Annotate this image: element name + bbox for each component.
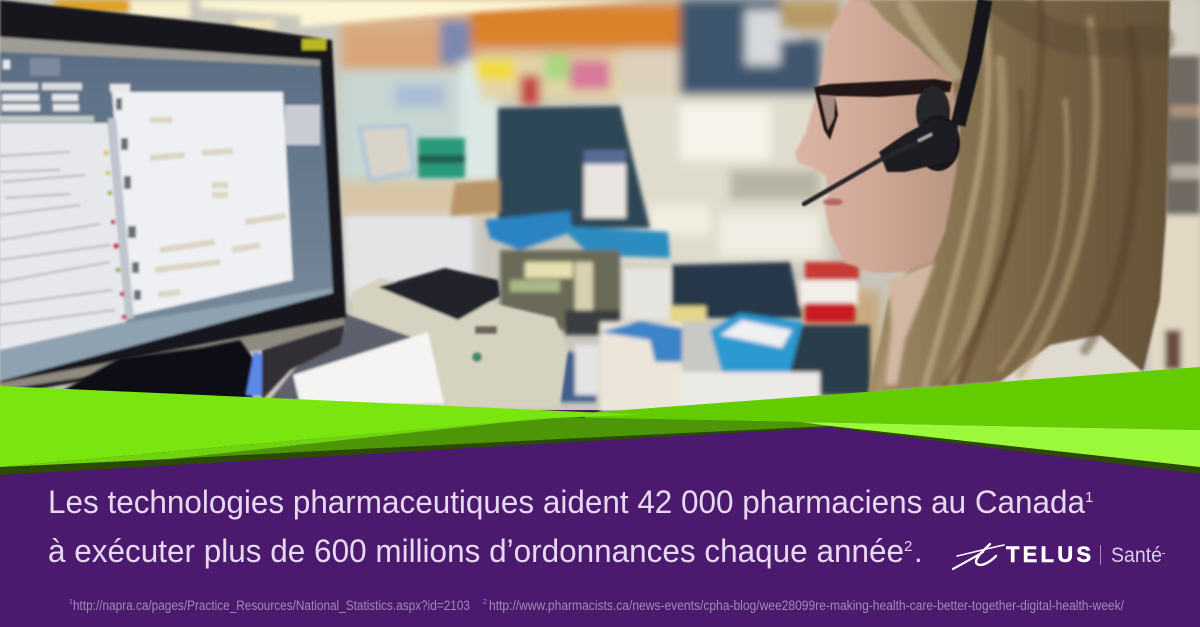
blurred counter objects — [346, 106, 870, 412]
headline — [48, 484, 1093, 569]
wordmark TELUS: TELUS — [1006, 542, 1091, 567]
headline line 1: Les technologies pharmaceutiques aident 42 000 pharmaciens au Canada — [48, 484, 1086, 520]
TELUS Santé logo — [953, 542, 1165, 569]
centre dark green fold — [170, 417, 830, 459]
form text lines — [0, 152, 115, 325]
dark green shadow strip — [0, 426, 1200, 475]
icon: TELUS script t — [953, 544, 1004, 569]
photo background: blurred pharmacy shelves — [340, 0, 880, 400]
woman: face — [795, 0, 960, 273]
headline line 2: à exécuter plus de 600 millions d’ordonnances chaque année — [48, 533, 904, 569]
footnote 1: 1 — [69, 599, 73, 606]
wordmark Santé: Santé — [1111, 544, 1162, 567]
ceiling lights — [55, 0, 650, 29]
monitor lip — [0, 318, 346, 390]
left bright green fold — [0, 386, 640, 467]
left lower green fold — [0, 417, 555, 467]
logo divider — [1100, 545, 1101, 565]
woman: neck — [885, 262, 935, 385]
screen form panels — [112, 92, 293, 316]
photo: pharmacist at workstation — [0, 0, 1200, 412]
headline line 1: 1 — [1085, 489, 1093, 506]
screen taskbar — [0, 288, 333, 381]
footnotes — [69, 598, 1124, 613]
monitor screen — [0, 37, 333, 381]
purple panel — [0, 427, 1200, 627]
label printer — [270, 268, 568, 408]
computer monitor — [0, 0, 346, 395]
right lime fold — [800, 422, 1200, 467]
woman: headset — [804, 0, 985, 204]
woman: lips — [823, 198, 843, 206]
headline line 2: 2 — [904, 538, 912, 555]
footnote 2: http://www.pharmacists.ca/news-events/cpha-blog/wee28099re-making-health-care-better-together-digital-health-week/ — [489, 598, 1124, 613]
background right wall — [1150, 0, 1200, 385]
monitor bezel — [0, 0, 346, 395]
headline line 2: . — [914, 534, 923, 569]
woman: glasses — [814, 79, 952, 140]
keyboard and mouse — [60, 325, 345, 400]
status dots — [104, 150, 126, 320]
woman: white coat — [990, 330, 1150, 385]
green ribbon banner — [0, 367, 1200, 475]
footnote 1: http://napra.ca/pages/Practice_Resources/National_Statistics.aspx?id=2103 — [73, 598, 470, 613]
woman: hair — [850, 0, 1170, 392]
right mid green fold — [585, 367, 1200, 430]
footnote 2: 2 — [483, 599, 487, 606]
